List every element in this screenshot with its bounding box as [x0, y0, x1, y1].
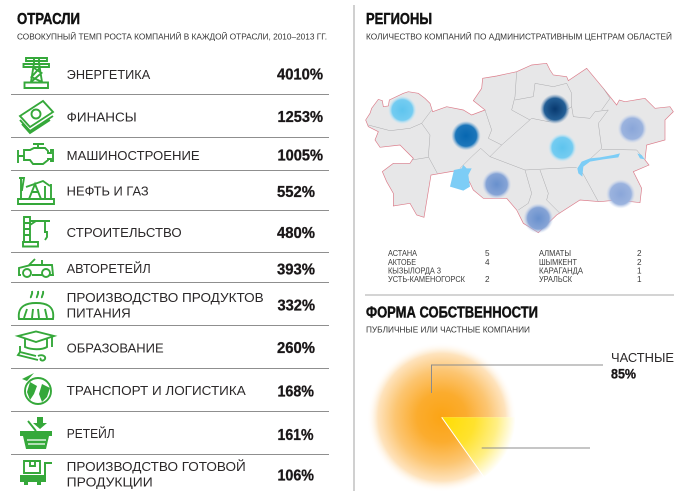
panel: regions [366, 11, 673, 284]
row: construction [23, 217, 315, 246]
row: food production: 332% [278, 298, 315, 315]
row: car retail: АВТОРЕТЕЙЛ [67, 261, 151, 276]
legend: companies by region: 2 [637, 249, 642, 258]
row: education: 260% [277, 340, 315, 357]
icon: oil pump [18, 178, 54, 204]
legend: companies by region [388, 249, 642, 284]
icon: cart with box [20, 461, 52, 485]
row: education: ОБРАЗОВАНИЕ [67, 342, 164, 356]
icon: power pylon [24, 58, 49, 88]
legend: companies by region: АСТАНА [388, 249, 417, 258]
icon: engine [18, 144, 53, 164]
icon: graduation cap and diploma [18, 332, 54, 361]
row: machinery [18, 144, 323, 165]
row: car retail: 393% [277, 262, 315, 279]
region bubbles [388, 94, 647, 233]
legend: companies by region: 1 [637, 267, 642, 276]
row: transport and logistics [22, 373, 314, 404]
row: machinery: МАШИНОСТРОЕНИЕ [67, 149, 200, 163]
legend: companies by region: УСТЬ-КАМЕНОГОРСК [388, 275, 465, 284]
row: construction: 480% [277, 225, 315, 242]
leader lines [432, 365, 603, 448]
row: retail: РЕТЕЙЛ [67, 426, 115, 441]
legend: companies by region: КАРАГАНДА [539, 267, 583, 276]
callout: private companies: ЧАСТНЫЕ [611, 351, 674, 365]
icon: shopping basket [20, 417, 52, 449]
row: retail: 161% [278, 427, 314, 444]
row: machinery: 1005% [278, 148, 323, 165]
row: oil and gas: НЕФТЬ И ГАЗ [67, 185, 149, 199]
row: finance: 1253% [278, 109, 323, 126]
legend: companies by region: 4 [485, 258, 490, 267]
callout: private companies [611, 351, 674, 382]
subtitle: industries: СОВОКУПНЫЙ ТЕМП РОСТА КОМПАНИЙ В КАЖДОЙ ОТРАСЛИ, 2010–2013 ГГ. [17, 30, 327, 42]
pie chart [367, 342, 518, 492]
row: energy: 4010% [277, 66, 323, 84]
icon: tower crane [23, 217, 50, 246]
row: construction: СТРОИТЕЛЬСТВО [67, 226, 182, 240]
row: finance: ФИНАНСЫ [67, 111, 137, 125]
heading: ownership: ФОРМА СОБСТВЕННОСТИ [366, 305, 538, 322]
legend: companies by region: УРАЛЬСК [539, 275, 572, 284]
row: transport and logistics: 168% [278, 384, 314, 401]
legend: companies by region: АКТОБЕ [388, 258, 416, 267]
legend: companies by region: ШЫМКЕНТ [539, 258, 577, 267]
row: transport and logistics: ТРАНСПОРТ И ЛОГИСТИКА [67, 384, 246, 398]
row: finished goods: ПРОИЗВОДСТВО ГОТОВОЙ [67, 459, 246, 474]
icon: convertible car [19, 259, 53, 277]
legend: companies by region: 2 [485, 275, 490, 284]
row: finished goods: ПРОДУКЦИИ [67, 476, 153, 490]
row: oil and gas: 552% [277, 184, 315, 201]
legend: companies by region: 5 [485, 249, 490, 258]
row: energy: ЭНЕРГЕТИКА [67, 68, 151, 82]
row: finished goods [20, 459, 314, 490]
subtitle: regions: КОЛИЧЕСТВО КОМПАНИЙ ПО АДМИНИСТРАТИВНЫМ ЦЕНТРАМ ОБЛАСТЕЙ [366, 30, 672, 42]
map outline [366, 63, 673, 233]
row: food production: ПИТАНИЯ [67, 307, 131, 321]
callout: private companies: 85% [611, 366, 636, 382]
row: retail [20, 417, 314, 449]
row: food production [19, 291, 315, 321]
legend: companies by region: КЫЗЫЛОРДА 3 [388, 267, 441, 276]
icon: banknotes [20, 101, 53, 133]
lakes [450, 153, 645, 191]
panel: industries [11, 11, 329, 490]
heading: regions: РЕГИОНЫ [366, 11, 432, 28]
legend: companies by region: 2 [637, 258, 642, 267]
row: energy [24, 58, 323, 88]
row: food production: ПРОИЗВОДСТВО ПРОДУКТОВ [67, 291, 264, 305]
heading: industries: ОТРАСЛИ [17, 11, 80, 28]
row: education [18, 332, 315, 361]
row: car retail [19, 259, 315, 279]
subtitle: ownership: ПУБЛИЧНЫЕ ИЛИ ЧАСТНЫЕ КОМПАНИИ [366, 324, 530, 334]
row: oil and gas [18, 178, 315, 204]
icon: bread [19, 291, 53, 319]
icon: globe with plane [22, 373, 51, 404]
panel: ownership [366, 305, 674, 492]
row: finished goods: 106% [278, 468, 314, 485]
legend: companies by region: 1 [637, 275, 642, 284]
row: finance [20, 101, 323, 133]
map of Kazakhstan [366, 63, 673, 233]
legend: companies by region: АЛМАТЫ [539, 249, 571, 258]
